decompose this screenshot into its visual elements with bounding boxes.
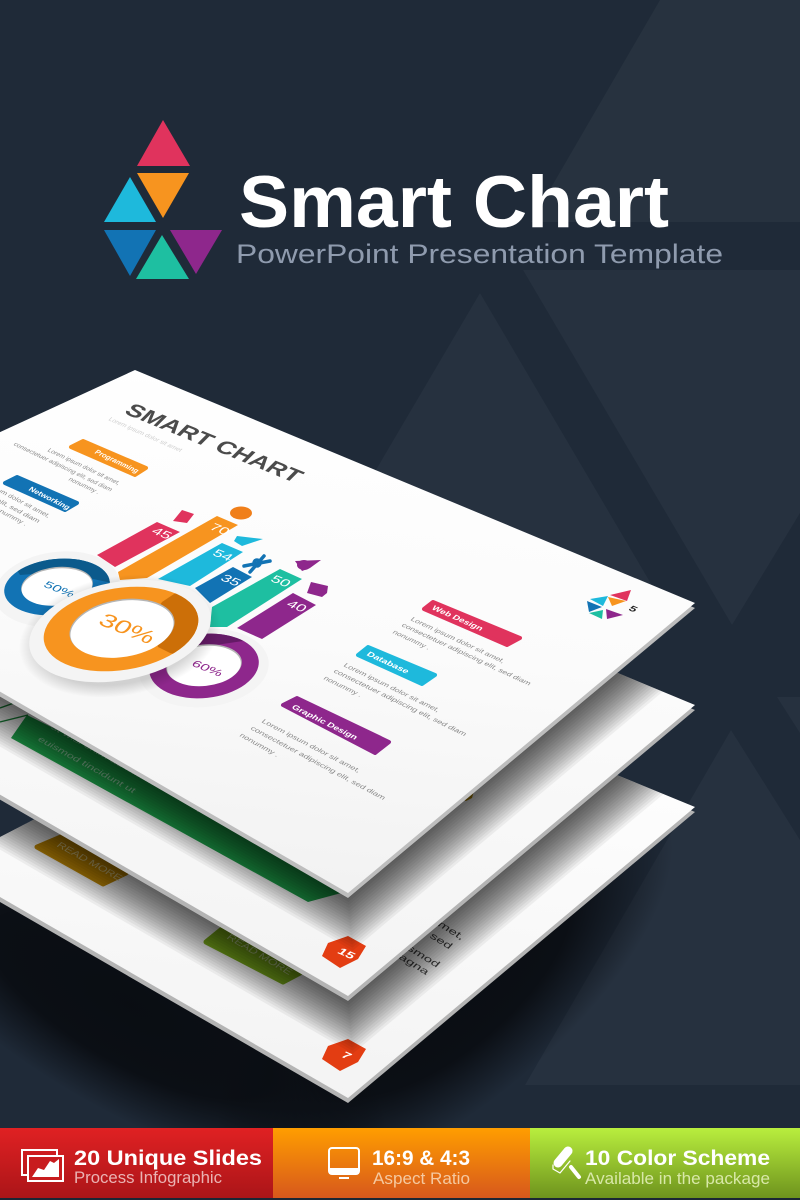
bar 45 <box>97 522 180 567</box>
footer strip background <box>0 1198 800 1200</box>
page badge 7: 7 <box>338 1049 355 1061</box>
green decorative lines <box>0 703 28 722</box>
donut 30%: 30% <box>94 610 160 648</box>
bar 70 <box>118 516 238 580</box>
label: Programming: nonummy . <box>67 476 102 495</box>
subtitle: PowerPoint Presentation Template <box>236 239 723 269</box>
label: Graphic Design: Lorem ipsum dolor sit amet, <box>260 717 363 774</box>
page badge 15 <box>322 936 366 968</box>
title: Smart Chart <box>239 162 669 243</box>
bar 35 <box>195 567 252 603</box>
read more green button: READ MORE <box>224 933 294 977</box>
footer panel: 20 unique slides <box>0 1128 273 1198</box>
bar 50 <box>210 569 302 627</box>
bar 70: 70 <box>206 522 233 538</box>
icon: rocket figure <box>295 560 321 571</box>
slide 2 (middle) <box>0 672 695 1001</box>
bar chart <box>97 516 316 639</box>
icon: ticket <box>173 510 194 523</box>
icon: handshake blob <box>230 506 252 520</box>
slide 3 (back) <box>0 775 695 1103</box>
slide heading: Lorem ipsum dolor sit amet <box>107 416 185 453</box>
label: Programming: Lorem ipsum dolor sit amet, <box>46 447 122 486</box>
label: Database: nonummy . <box>322 675 364 698</box>
icon: tools <box>244 556 270 572</box>
label: Web Design <box>391 602 533 687</box>
label: Graphic Design <box>238 698 389 801</box>
logo <box>104 120 222 279</box>
label: Database: consectetuer adipiscing elit, sed diam <box>332 668 469 737</box>
mini logo with page number: 5 <box>626 604 640 614</box>
icon: paper plane <box>234 536 263 546</box>
label: Database: Lorem ipsum dolor sit amet, <box>342 662 442 713</box>
green banner <box>11 715 360 902</box>
read more amber button <box>37 836 126 884</box>
bar 45: 45 <box>148 526 175 542</box>
body text fragment: agna <box>396 952 432 977</box>
body text fragment: amet, <box>428 915 467 942</box>
donut 30% <box>24 577 216 695</box>
green banner: euismod tincidunt ut <box>35 735 138 795</box>
bar 40 <box>237 593 316 639</box>
label: Web Design: nonummy . <box>391 629 432 651</box>
donut 50% <box>4 558 110 616</box>
label: Programming: consectetuer adipiscing elit, sed diam <box>12 441 114 493</box>
body text fragment <box>396 915 467 977</box>
green banner: ut wisi enim ad minim veniam quis nostrud <box>48 723 258 842</box>
body text fragment: smod <box>404 943 443 970</box>
label: Database: Database <box>364 650 411 676</box>
footer panel: aspect ratio <box>273 1128 530 1198</box>
label: Web Design: Web Design <box>430 604 486 632</box>
donut 60%: 60% <box>189 658 226 679</box>
icon: book <box>307 582 328 597</box>
footer panel: aspect ratio: Aspect Ratio <box>373 1169 470 1188</box>
page badge 7 <box>322 1039 366 1071</box>
shadow from slide 1 <box>0 672 662 950</box>
body text fragment: sed <box>427 931 455 951</box>
footer panel: 20 unique slides: 20 Unique Slides <box>74 1147 262 1170</box>
read more amber button: READ MORE <box>54 841 124 883</box>
icon: paint roller <box>553 1151 579 1177</box>
label: Networking: Networking <box>27 485 72 511</box>
bar 50: 50 <box>267 574 294 590</box>
donut 50%: 50% <box>41 579 78 600</box>
amber fragment <box>463 791 474 801</box>
label: Web Design: consectetuer adipiscing elit, sed diam <box>400 622 533 687</box>
label: Web Design: Lorem ipsum dolor sit amet, <box>409 616 507 664</box>
bar 40: 40 <box>283 599 310 615</box>
bar 35: 35 <box>217 573 244 589</box>
label: Graphic Design: nonummy . <box>238 731 281 758</box>
footer panel: color scheme: Available in the package <box>585 1169 770 1188</box>
bar 54 <box>158 543 243 586</box>
icon: gallery <box>22 1150 63 1181</box>
mini logo with page number <box>587 590 640 619</box>
slide 1 (front) <box>0 370 695 898</box>
label: Graphic Design: consectetuer adipiscing elit, sed diam <box>249 724 388 801</box>
footer panel: aspect ratio: 16:9 & 4:3 <box>372 1147 470 1170</box>
bar 54: 54 <box>209 548 236 564</box>
footer panel: color scheme: 10 Color Scheme <box>585 1147 770 1170</box>
icon: monitor <box>329 1148 359 1179</box>
shadow from slide 2 <box>0 775 663 1054</box>
label: Graphic Design: Graphic Design <box>289 703 360 742</box>
label: Programming: Programming <box>93 448 141 474</box>
footer panel: 20 unique slides: Process Infographic <box>74 1168 222 1187</box>
footer panel: color scheme <box>530 1128 800 1198</box>
label: Database <box>322 647 469 737</box>
slide heading: SMART CHART <box>119 400 308 487</box>
page badge 15: 15 <box>335 946 359 961</box>
donut 60% <box>150 634 259 698</box>
